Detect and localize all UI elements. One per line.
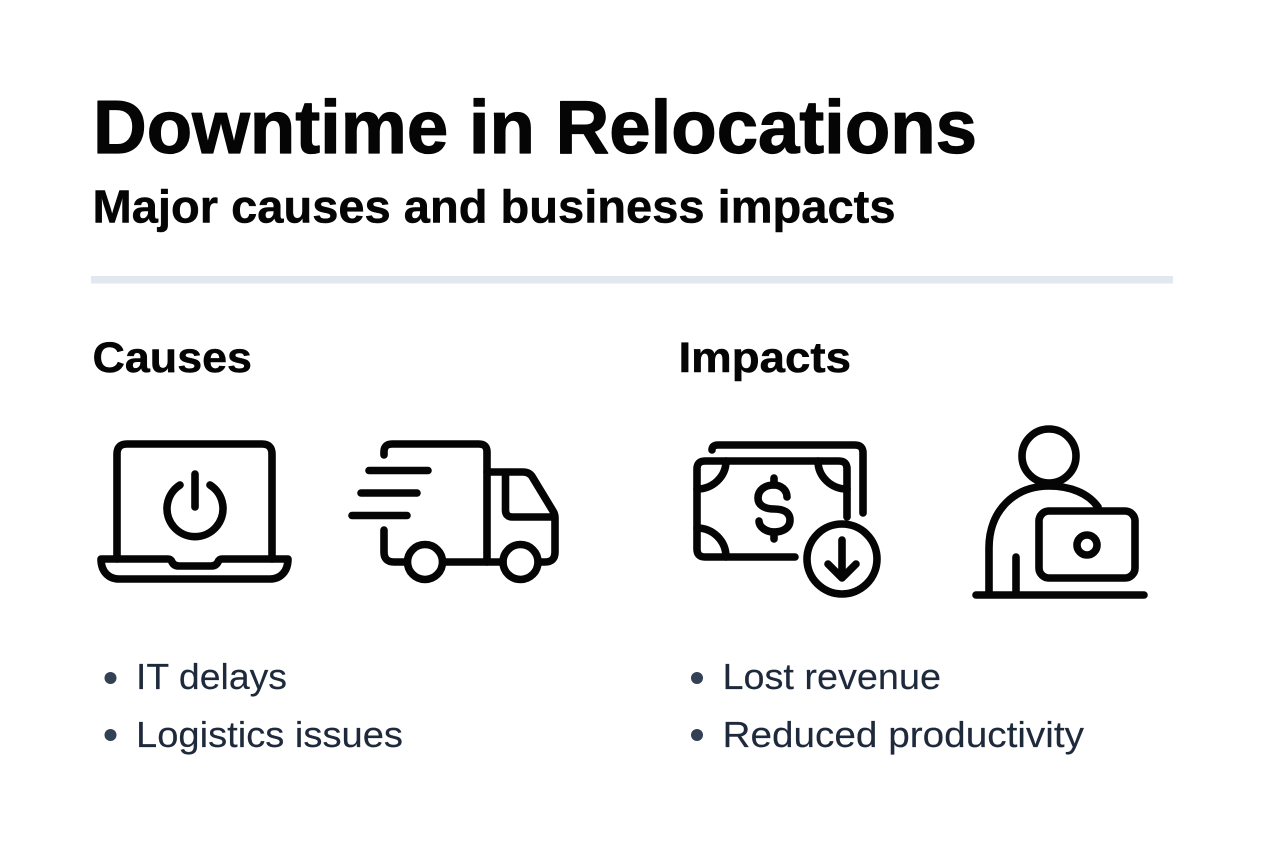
panel: impacts: [678, 334, 1144, 755]
bullet: Logistics issues: Logistics issues: [136, 714, 403, 755]
heading: impacts: Impacts: [678, 334, 851, 382]
icon: moving truck: [352, 444, 555, 580]
subtitle: Major causes and business impacts: [92, 180, 896, 232]
list: causes: [104, 656, 403, 755]
list: impacts: [691, 656, 1084, 755]
bullet: Reduced productivity: Reduced productivity: [722, 714, 1084, 755]
icon: person at laptop: [976, 429, 1144, 595]
bullet: Lost revenue: Lost revenue: [722, 656, 941, 697]
title: Downtime in Relocations: [93, 85, 977, 169]
panel: causes: [92, 334, 555, 755]
bullet: IT delays: IT delays: [136, 656, 287, 697]
icon: money with down arrow: [697, 445, 877, 594]
icon: laptop with power symbol: [101, 444, 288, 579]
heading: causes: Causes: [92, 334, 252, 382]
